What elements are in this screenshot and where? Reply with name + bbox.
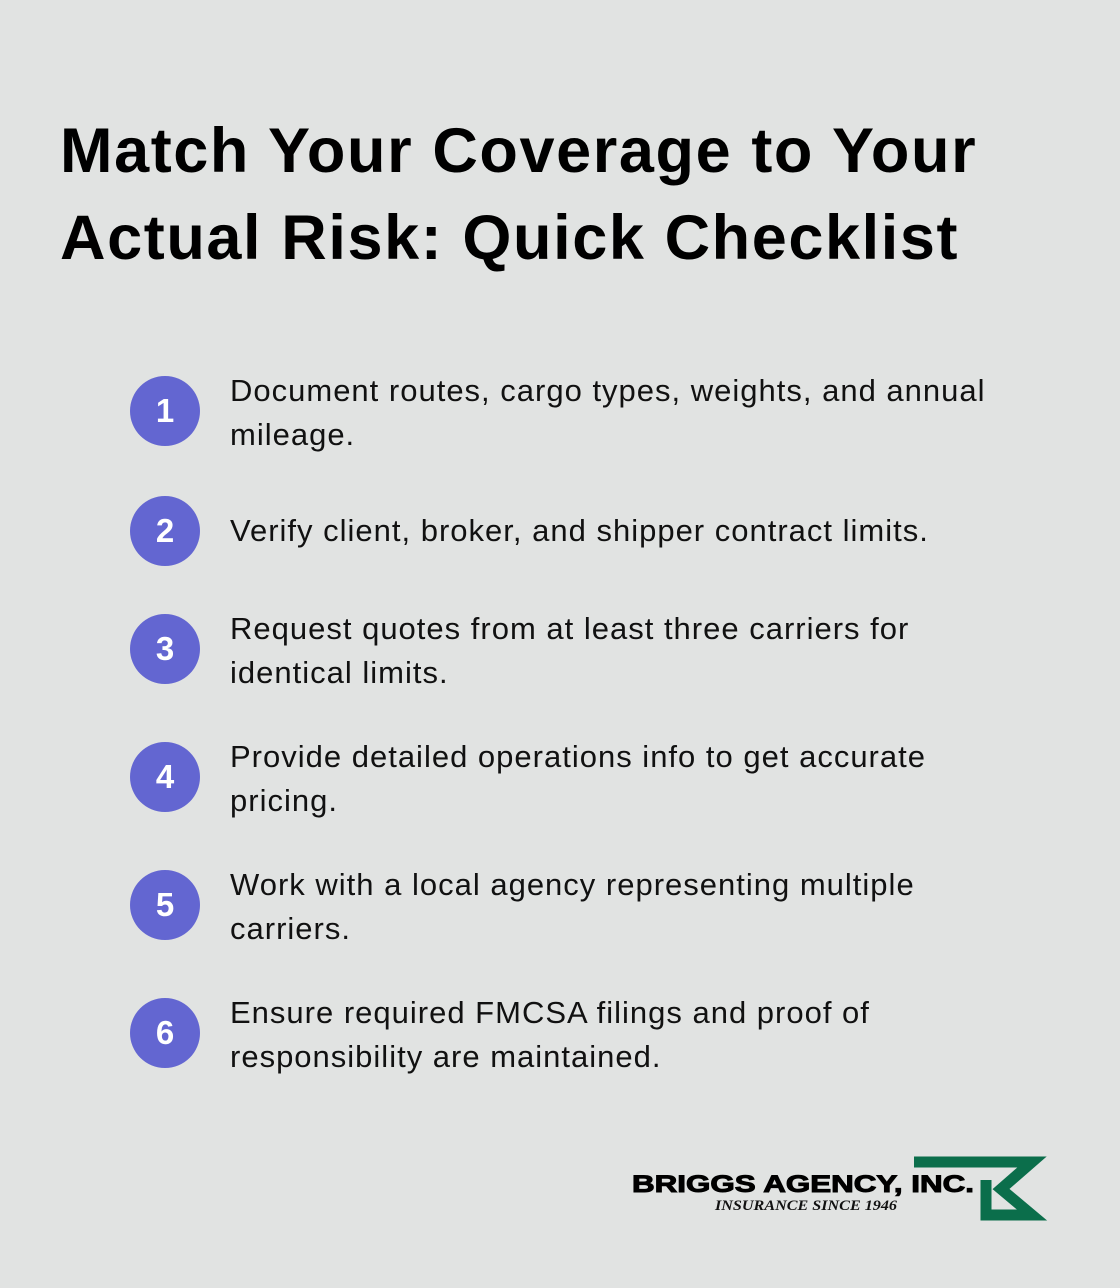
icon: number 4: 4 xyxy=(156,758,174,795)
icon: number 2 xyxy=(130,496,200,566)
icon: number 5: 5 xyxy=(156,886,174,923)
item 3 xyxy=(130,611,909,690)
icon: number 2: 2 xyxy=(156,512,174,549)
logo text: INSURANCE SINCE 1946 xyxy=(714,1198,898,1214)
icon: number 4 xyxy=(130,742,200,812)
item 6 xyxy=(130,995,870,1074)
item 5 xyxy=(130,867,915,946)
icon: number 1 xyxy=(130,376,200,446)
logo mark xyxy=(914,1162,1032,1215)
icon: number 3: 3 xyxy=(156,630,174,667)
item 4 xyxy=(130,739,926,818)
text 5: Work with a local agency representing multiple carriers. xyxy=(230,867,915,946)
icon: number 6 xyxy=(130,998,200,1068)
text 1: Document routes, cargo types, weights, and annual mileage. xyxy=(230,373,986,452)
icon: number 5 xyxy=(130,870,200,940)
icon: number 1: 1 xyxy=(156,392,174,429)
text 6: Ensure required FMCSA filings and proof of responsibility are maintained. xyxy=(230,995,870,1074)
logo text xyxy=(632,1171,974,1214)
logo text: BRIGGS AGENCY, INC. xyxy=(632,1171,974,1198)
icon: number 3 xyxy=(130,614,200,684)
text 2: Verify client, broker, and shipper contract limits. xyxy=(230,513,929,548)
text 3: Request quotes from at least three carriers for identical limits. xyxy=(230,611,909,690)
item 1 xyxy=(130,373,986,452)
title: Match Your Coverage to Your Actual Risk: Quick Checklist xyxy=(60,116,977,273)
icon: number 6: 6 xyxy=(156,1014,174,1051)
text 4: Provide detailed operations info to get accurate pricing. xyxy=(230,739,926,818)
item 2 xyxy=(130,496,929,566)
logo xyxy=(632,1156,1047,1220)
